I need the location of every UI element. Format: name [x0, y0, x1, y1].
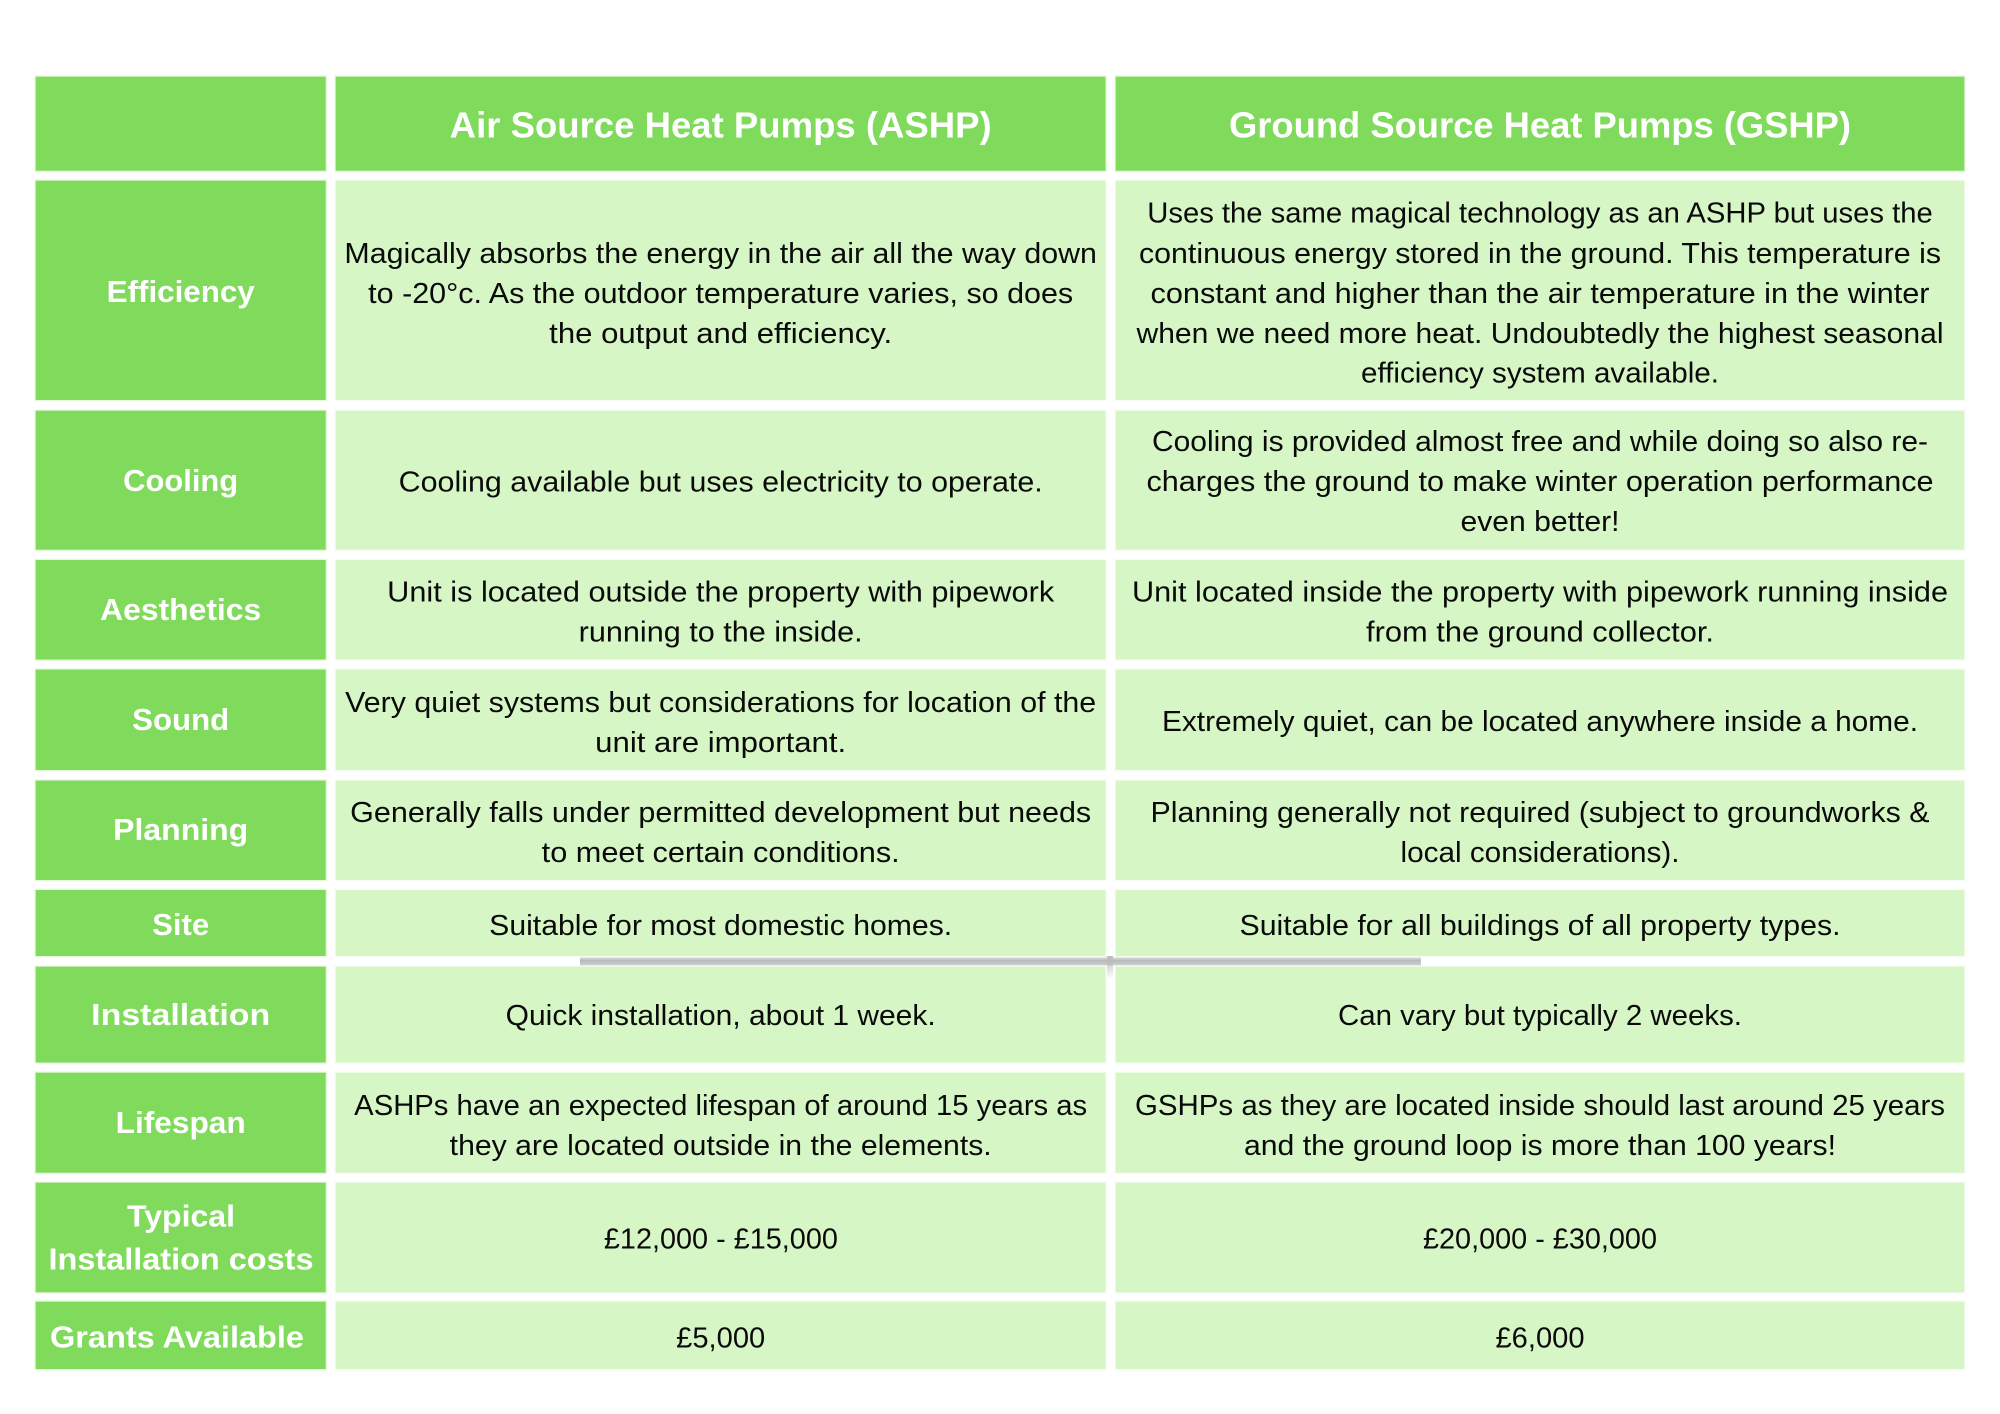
- label: Typical Installation costs: Installation costs: [48, 1242, 314, 1276]
- ASHP sound: unit are important.: [595, 727, 846, 759]
- label: Sound: [36, 670, 326, 770]
- ASHP efficiency: to -20°c. As the outdoor temperature varies, so does: [368, 278, 1073, 310]
- label: Grants Available: [36, 1302, 326, 1369]
- GSHP cost: [1116, 1183, 1964, 1292]
- ASHP cost: £12,000 - £15,000: [604, 1224, 838, 1256]
- GSHP sound: Extremely quiet, can be located anywhere inside a home.: [1162, 706, 1918, 738]
- divider shadow: [580, 956, 1421, 979]
- ASHP efficiency: [336, 181, 1106, 400]
- label: Typical Installation costs: Typical: [127, 1200, 235, 1234]
- GSHP sound: [1116, 670, 1964, 770]
- ASHP grant: £5,000: [676, 1322, 765, 1354]
- GSHP grant: [1116, 1302, 1964, 1369]
- row: Planning: [36, 781, 1964, 880]
- row: Lifespan: [36, 1073, 1964, 1173]
- GSHP efficiency: [1116, 181, 1964, 400]
- label: Planning: [36, 781, 326, 880]
- row: Sound: [36, 670, 1964, 770]
- ASHP sound: Very quiet systems but considerations for location of the: [345, 687, 1096, 719]
- ASHP installation: [336, 967, 1106, 1062]
- label: Site: Site: [152, 908, 209, 942]
- label: Grants Available: Grants Available: [50, 1320, 304, 1354]
- label: Installation: Installation: [91, 998, 270, 1032]
- ASHP lifespan: ASHPs have an expected lifespan of around 15 years as: [354, 1090, 1087, 1122]
- GSHP aesthetics: [1116, 560, 1964, 660]
- GSHP installation: Can vary but typically 2 weeks.: [1338, 1000, 1742, 1032]
- GSHP efficiency: when we need more heat. Undoubtedly the highest seasonal: [1135, 318, 1944, 350]
- GSHP efficiency: Uses the same magical technology as an ASHP but uses the: [1147, 198, 1933, 230]
- ASHP installation: Quick installation, about 1 week.: [506, 1000, 936, 1032]
- header: Ground Source Heat Pumps: [1116, 77, 1964, 171]
- ASHP planning: to meet certain conditions.: [542, 837, 900, 869]
- ASHP lifespan: [336, 1073, 1106, 1173]
- GSHP planning: Planning generally not required (subject to groundworks &: [1150, 797, 1930, 829]
- header: Air Source Heat Pumps: [336, 77, 1106, 171]
- row: Site: [36, 890, 1964, 956]
- row: Cooling: [36, 411, 1964, 550]
- label: Typical Installation costs: [36, 1183, 326, 1292]
- label: Installation: [36, 967, 326, 1062]
- label: Site: [36, 890, 326, 956]
- ASHP site: [336, 890, 1106, 956]
- GSHP lifespan: and the ground loop is more than 100 years!: [1244, 1130, 1836, 1162]
- ASHP cooling: Cooling available but uses electricity to operate.: [399, 466, 1043, 498]
- header: empty corner cell: [36, 77, 326, 171]
- ASHP site: Suitable for most domestic homes.: [489, 910, 952, 942]
- ASHP aesthetics: running to the inside.: [579, 616, 863, 648]
- GSHP efficiency: efficiency system available.: [1361, 358, 1719, 390]
- ASHP planning: Generally falls under permitted development but needs: [350, 797, 1091, 829]
- GSHP cooling: [1116, 411, 1964, 550]
- GSHP cost: £20,000 - £30,000: [1423, 1224, 1657, 1256]
- GSHP cooling: Cooling is provided almost free and while doing so also re-: [1152, 426, 1928, 458]
- GSHP aesthetics: Unit located inside the property with pipework running inside: [1132, 576, 1948, 608]
- label: Lifespan: Lifespan: [116, 1106, 246, 1140]
- header: Ground Source Heat Pumps: Ground Source Heat Pumps (GSHP): [1229, 104, 1851, 146]
- GSHP efficiency: continuous energy stored in the ground. This temperature is: [1139, 238, 1941, 270]
- row: Grants Available: [36, 1302, 1964, 1369]
- label: Aesthetics: Aesthetics: [100, 593, 261, 627]
- GSHP site: Suitable for all buildings of all property types.: [1240, 910, 1840, 942]
- GSHP grant: £6,000: [1496, 1322, 1584, 1354]
- row: Aesthetics: [36, 560, 1964, 660]
- row: Efficiency: [36, 181, 1964, 400]
- GSHP site: [1116, 890, 1964, 956]
- label: Efficiency: Efficiency: [107, 275, 255, 309]
- GSHP cooling: even better!: [1460, 506, 1620, 538]
- ASHP aesthetics: Unit is located outside the property with pipework: [387, 576, 1055, 608]
- ASHP efficiency: the output and efficiency.: [549, 318, 892, 350]
- GSHP lifespan: GSHPs as they are located inside should last around 25 years: [1135, 1090, 1945, 1122]
- ASHP planning: [336, 781, 1106, 880]
- GSHP planning: local considerations).: [1400, 837, 1680, 869]
- label: Efficiency: [36, 181, 326, 400]
- ASHP cooling: [336, 411, 1106, 550]
- ASHP cost: [336, 1183, 1106, 1292]
- GSHP aesthetics: from the ground collector.: [1366, 616, 1714, 648]
- label: Cooling: [36, 411, 326, 550]
- label: Planning: Planning: [113, 813, 248, 847]
- GSHP lifespan: [1116, 1073, 1964, 1173]
- GSHP cooling: charges the ground to make winter operation performance: [1146, 466, 1934, 498]
- GSHP installation: [1116, 967, 1964, 1062]
- row: Installation: [36, 967, 1964, 1062]
- header: Air Source Heat Pumps: Air Source Heat Pumps (ASHP): [450, 104, 992, 146]
- ASHP aesthetics: [336, 560, 1106, 660]
- ASHP efficiency: Magically absorbs the energy in the air all the way down: [344, 238, 1097, 270]
- label: Cooling: Cooling: [123, 464, 238, 498]
- row: Typical Installation costs: [36, 1183, 1964, 1292]
- ASHP sound: [336, 670, 1106, 770]
- label: Aesthetics: [36, 560, 326, 660]
- ASHP lifespan: they are located outside in the elements.: [450, 1130, 992, 1162]
- label: Lifespan: [36, 1073, 326, 1173]
- GSHP efficiency: constant and higher than the air temperature in the winter: [1150, 278, 1930, 310]
- ASHP grant: [336, 1302, 1106, 1369]
- label: Sound: Sound: [132, 703, 229, 737]
- GSHP planning: [1116, 781, 1964, 880]
